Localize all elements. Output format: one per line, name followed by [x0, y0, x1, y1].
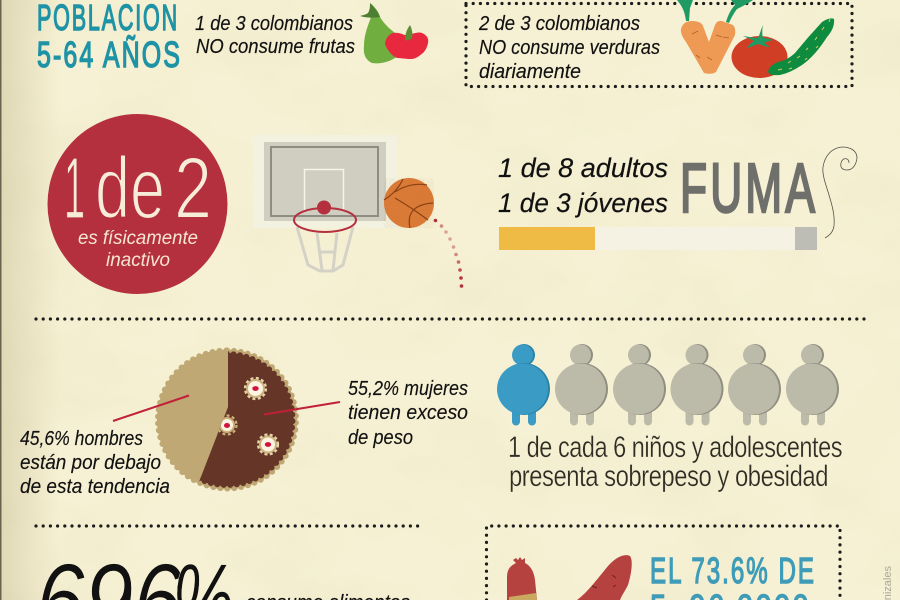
heading: población 5-64 años	[37, 0, 182, 75]
callout: 1 de 2 red circle: inactivo	[106, 250, 170, 271]
panel: vegetables statistic: 2 de 3 colombianos	[478, 13, 640, 35]
text: women excess weight: 55,2% mujeres	[348, 378, 468, 400]
icon: pear and apple	[360, 3, 428, 63]
text: women excess weight	[348, 378, 468, 449]
callout: 1 de 2 red circle: es físicamente	[78, 228, 198, 249]
heading: población 5-64 años: 5-64 AÑOS	[37, 34, 182, 75]
callout: 1 de 2 red circle: de	[95, 140, 165, 237]
child: grey 3	[613, 344, 666, 426]
text: children overweight statistic: presenta sobrepeso y obesidad	[509, 460, 828, 493]
text: men below trend	[20, 428, 170, 498]
text: women excess weight: de peso	[348, 427, 413, 449]
text: 73.6%	[650, 550, 816, 600]
text: 73.6%: EL 73.6% DE	[650, 550, 816, 591]
panel: vegetables statistic: diariamente	[479, 61, 581, 83]
flower decoration: centre	[218, 416, 236, 434]
icon: smoke curl	[823, 147, 857, 238]
text: smoking statistic: 1 de 3 jóvenes	[498, 188, 668, 218]
divider	[36, 524, 424, 528]
text: men below trend: de esta tendencia	[20, 476, 170, 498]
icon: cigarette	[499, 227, 817, 250]
flower decoration: upper	[245, 378, 266, 399]
text: women excess weight: tienen exceso	[348, 402, 468, 424]
panel: sausage statistic	[486, 526, 840, 600]
callout: 1 de 2 red circle	[48, 114, 228, 294]
icon: basketball with dotted trajectory	[384, 178, 463, 288]
callout: 1 de 2 red circle: 2	[174, 140, 212, 237]
icon row: six children, one highlighted	[497, 344, 839, 426]
panel: vegetables statistic: NO consume verduras	[479, 37, 660, 59]
text: children overweight statistic	[508, 431, 842, 493]
text: fruit statistic	[195, 13, 355, 58]
icon: basketball hoop	[253, 135, 397, 271]
child: grey 2	[555, 344, 608, 426]
divider	[36, 317, 866, 321]
icon: sausage	[507, 555, 632, 600]
text: smoking statistic: 1 de 8 adultos	[498, 153, 668, 183]
text: fruit statistic: 1 de 3 colombianos	[195, 13, 353, 35]
heading: FUMA: FUMA	[680, 149, 818, 227]
chart: pie shaped as a tart	[113, 350, 340, 490]
child: grey 4	[670, 344, 724, 426]
child: grey 6	[786, 344, 839, 426]
text: men below trend: están por debajo	[20, 452, 161, 474]
text: men below trend: 45,6% hombres	[20, 428, 143, 450]
child: blue	[497, 344, 550, 426]
callout: 1 de 2 red circle: 1	[64, 140, 85, 237]
icon: carrots, tomato and cucumber	[677, 0, 834, 78]
text: fruit statistic: NO consume frutas	[196, 36, 355, 58]
panel: vegetables statistic	[466, 0, 852, 86]
flower decoration: lower	[258, 434, 278, 454]
text: smoking statistic	[498, 153, 668, 218]
child: grey 5	[728, 344, 781, 426]
